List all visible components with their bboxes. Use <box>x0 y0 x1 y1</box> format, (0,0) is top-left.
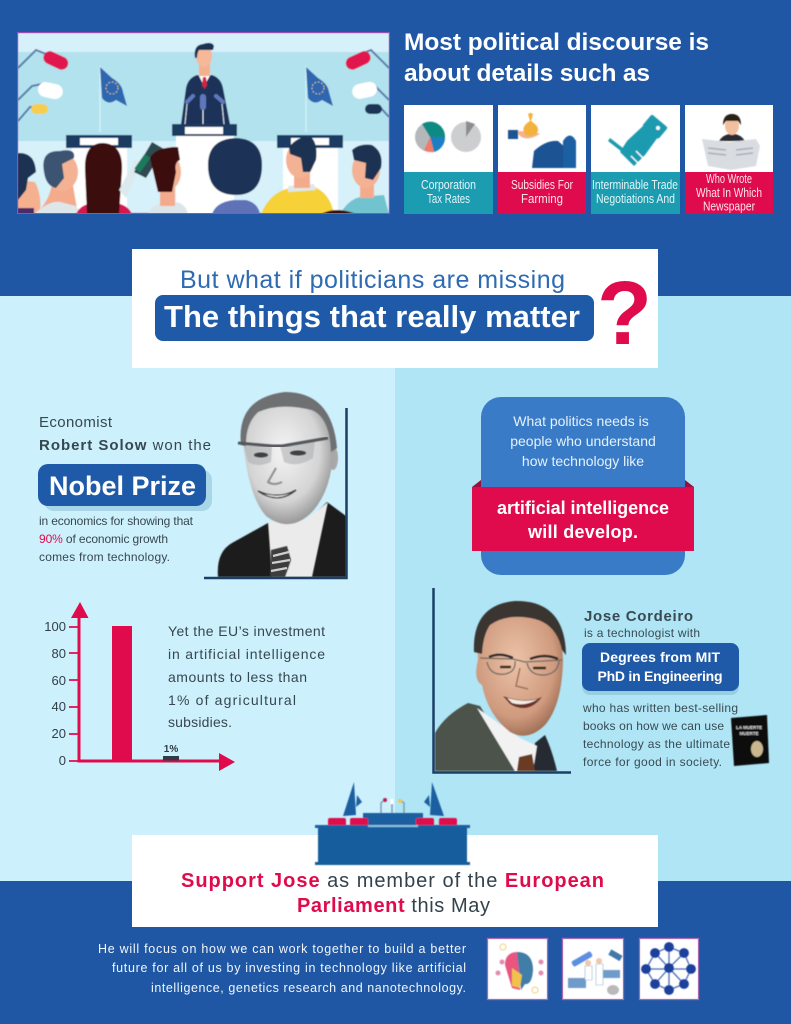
text: Jose Cordeiro <box>582 608 739 769</box>
title banner <box>132 249 658 368</box>
card: newspaper: Newspaper <box>703 198 756 214</box>
bar chart: EU AI investment vs agricultural subsidies: 1% <box>164 744 178 755</box>
title pill: The things that really matter <box>164 299 580 334</box>
speaker <box>172 43 237 136</box>
text: Jose Cordeiro: Jose Cordeiro <box>584 608 693 625</box>
text: Robert Solow: comes from technology. <box>39 550 170 564</box>
icon: money bag and barn <box>508 113 576 168</box>
microphones <box>381 799 404 813</box>
banner: support Jose: Support Jose as member of the European <box>181 870 604 892</box>
card: newspaper: What In Which <box>696 185 762 200</box>
card: corporation tax rates: Corporation <box>421 177 476 192</box>
callout: what politics needs: how technology like <box>522 453 644 469</box>
text: Robert Solow: 90% of economic growth <box>39 532 168 546</box>
microphones right <box>344 49 389 117</box>
heading: political discourse: about details such as <box>404 60 650 87</box>
text: closing statement: future for all of us by investing in technology like artificial <box>112 961 466 975</box>
icon: genetics research <box>562 938 624 1000</box>
icon: book cover: LA MUERTE <box>736 725 762 730</box>
y axis labels <box>44 619 66 768</box>
text: EU investment: amounts to less than <box>168 669 307 685</box>
icon: handshake <box>608 114 668 166</box>
flags <box>343 782 444 816</box>
text: EU investment: Yet the EU’s investment <box>168 623 325 639</box>
podiums <box>66 135 343 214</box>
bar: AI 1 percent <box>163 756 179 760</box>
callout: Nobel Prize <box>38 464 212 511</box>
illustration: parliament <box>315 782 470 865</box>
text: Robert Solow <box>38 414 212 564</box>
arrow: y axis <box>71 602 88 618</box>
text: Robert Solow: Economist <box>39 414 113 431</box>
card: subsidies for farming <box>498 105 586 214</box>
y axis labels: 100 <box>44 619 66 634</box>
red ribbon <box>472 480 694 551</box>
text: Robert Solow: Robert Solow won the <box>39 437 211 454</box>
callout: what politics needs <box>472 397 694 575</box>
card: trade negotiations: Negotiations And <box>596 191 675 206</box>
card: corporation tax rates: Tax Rates <box>427 191 470 206</box>
text: EU investment: 1% of agricultural <box>168 692 296 708</box>
text: Jose Cordeiro: is a technologist with <box>584 626 700 640</box>
photo: Jose Cordeiro <box>434 588 571 772</box>
callout: degrees: PhD in Engineering <box>598 668 722 684</box>
card: newspaper <box>685 105 773 214</box>
arrow: x axis <box>219 753 235 771</box>
text: closing statement <box>98 942 466 995</box>
text: Jose Cordeiro: books on how we can use <box>583 719 724 733</box>
card: subsidies for farming: Subsidies For <box>511 177 574 192</box>
illustration: press conference <box>17 32 390 214</box>
text: closing statement: intelligence, genetics research and nanotechnology. <box>151 981 466 995</box>
y axis labels: 0 <box>59 753 66 768</box>
banner: support Jose <box>132 835 658 927</box>
audience <box>18 137 389 214</box>
EU flags <box>100 66 333 132</box>
card: corporation tax rates <box>404 105 493 214</box>
red ribbon: will develop. <box>527 522 638 542</box>
microphones left <box>18 49 70 121</box>
callout: what politics needs: What politics needs is <box>513 413 649 429</box>
callout: what politics needs: people who understand <box>510 433 656 449</box>
text: closing statement: He will focus on how we can work together to build a better <box>98 942 466 956</box>
text: Jose Cordeiro: force for good in society. <box>583 755 722 769</box>
main table <box>315 825 470 828</box>
central desk <box>363 813 423 826</box>
icon: book cover <box>731 715 769 766</box>
icon: pie charts <box>415 121 481 152</box>
text: EU investment: subsidies. <box>168 714 232 730</box>
y axis labels: 40 <box>52 699 66 714</box>
heading: political discourse <box>404 29 709 87</box>
bar: agriculture <box>112 626 132 761</box>
y axis labels: 60 <box>52 673 66 688</box>
text: Jose Cordeiro: who has written best-selling <box>582 701 738 715</box>
callout: degrees: Degrees from MIT <box>600 649 720 665</box>
icon: nanotechnology <box>640 938 698 1000</box>
bar chart: EU AI investment vs agricultural subsidies <box>44 602 235 771</box>
y axis labels: 80 <box>52 646 66 661</box>
card: subsidies for farming: Farming <box>521 191 563 206</box>
text: Robert Solow: in economics for showing that <box>39 514 194 528</box>
card: newspaper: Who Wrote <box>706 171 752 186</box>
card: trade negotiations <box>591 105 680 214</box>
banner: support Jose: Parliament this May <box>297 895 490 917</box>
icon: book cover: MUERTE <box>740 731 758 736</box>
callout: Nobel Prize: Nobel Prize <box>49 471 196 501</box>
icon: artificial intelligence <box>488 938 548 1000</box>
icon: man reading newspaper <box>702 114 760 170</box>
title banner: But what if politicians are missing <box>180 266 565 294</box>
heading: political discourse: Most political discourse is <box>404 29 709 56</box>
photo: Robert Solow <box>204 392 346 578</box>
y axis labels: 20 <box>52 726 66 741</box>
icon: question mark: ? <box>597 264 652 364</box>
text: EU investment: in artificial intelligence <box>168 646 325 662</box>
red ribbon: artificial intelligence <box>497 498 669 518</box>
red seats <box>328 818 457 826</box>
text: EU investment <box>168 623 325 730</box>
callout: degrees <box>582 643 739 695</box>
text: Jose Cordeiro: technology as the ultimate <box>583 737 730 751</box>
card: trade negotiations: Interminable Trade <box>592 177 678 192</box>
